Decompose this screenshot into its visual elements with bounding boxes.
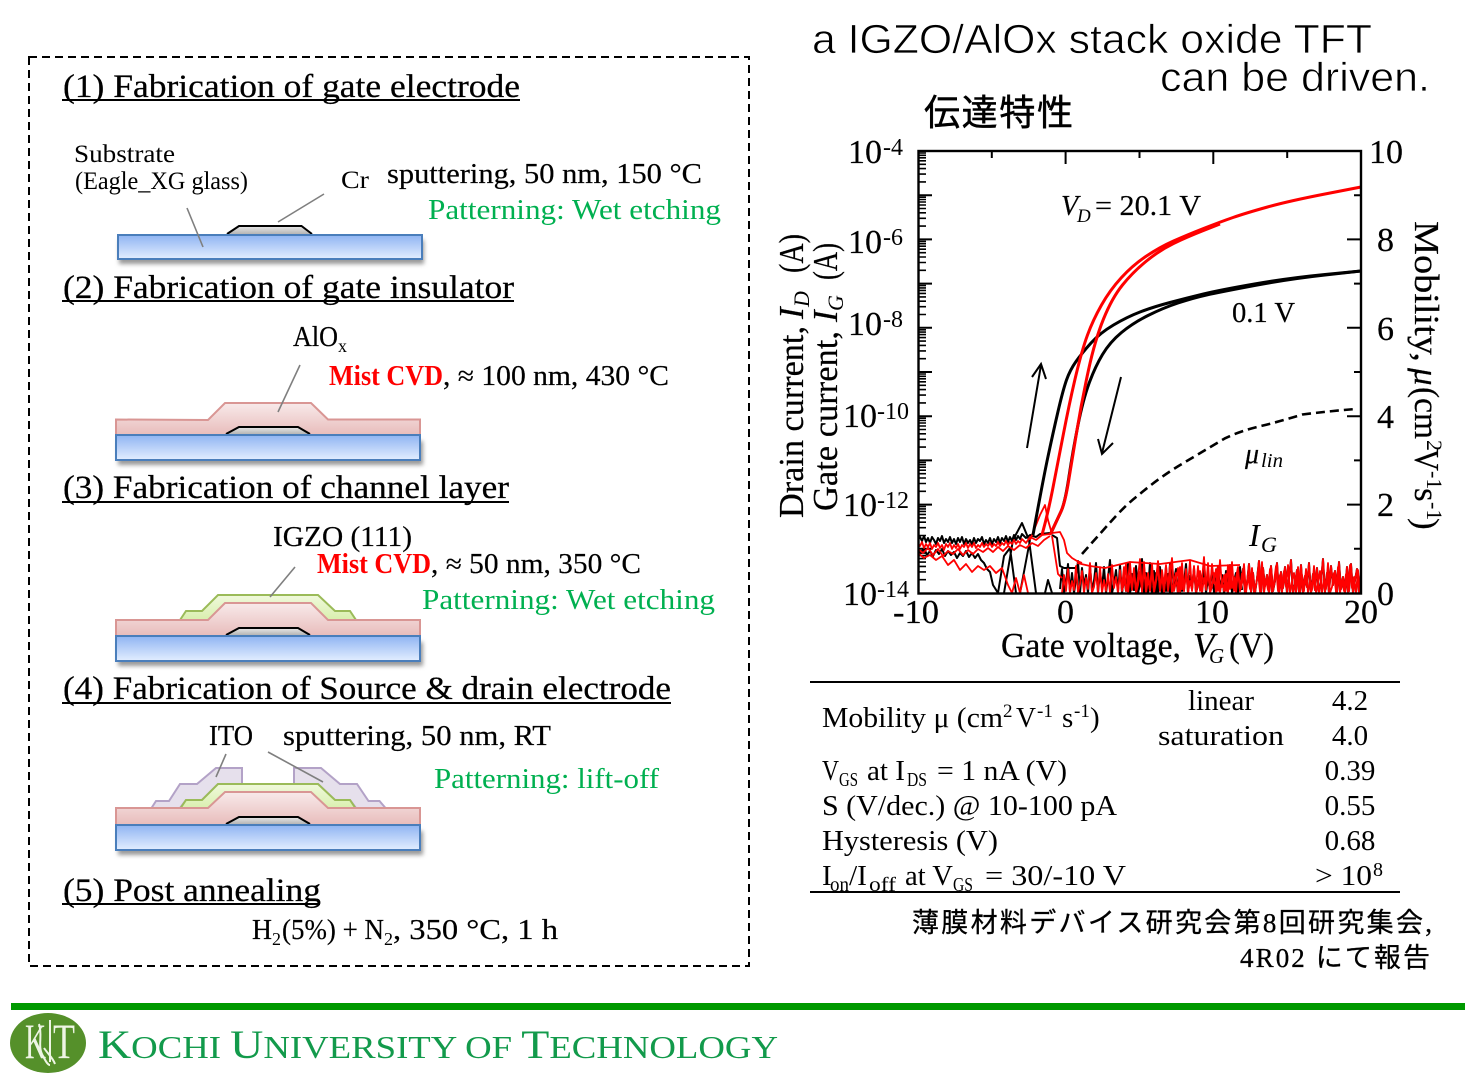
right y axis label: mobility: s [1407,488,1446,502]
label: 0.1 V: 0.1 V [1232,298,1295,329]
right y axis label: mobility: V [1407,449,1446,471]
left axis numbers: 10 [848,306,882,343]
row: mobility: 2 [1003,701,1012,722]
label: mu lin: lin [1261,450,1283,472]
text: step 2 mist CVD [329,360,669,392]
row: mobility: -1 [1037,701,1053,722]
row: on off ratio: = 30/-10 V [985,860,1126,892]
row: mobility: Mobility μ (cm [822,702,1003,734]
row: mobility [822,685,1368,752]
row: threshold: GS [839,769,858,791]
text: step 5 annealing conditions [252,915,558,949]
arrow: reverse sweep [1098,377,1121,454]
row: mobility: linear [1188,685,1254,717]
label: AlOx: AlO [293,322,338,353]
axis ticks [918,151,1361,580]
x axis label: G [1209,644,1224,668]
curve: mobility dashed [1082,409,1356,554]
row: mobility: ) [1090,702,1100,734]
right y axis label: mobility: Mobility, [1407,221,1446,362]
row: threshold: V [822,755,839,787]
left axis numbers: -6 [883,225,903,251]
row: subthreshold swing [822,790,1375,822]
note: conference report: 薄膜材料デバイス研究会第8回研究集会, [912,908,1432,938]
row: hysteresis [822,825,1375,857]
row: on off ratio: 8 [1373,859,1383,881]
icon: university logo: T [53,1013,75,1069]
gate current noise [920,504,1360,592]
text: step 3 mist CVD: Mist CVD [317,548,431,580]
curves: black 0.1 V [1033,271,1361,535]
icon: university logo [10,1013,86,1073]
text: step 1 sputtering: sputtering, 50 nm, 150 °C [387,159,702,190]
text: step 2 mist CVD: , ≈ 100 nm, 430 °C [443,361,669,392]
diagram: step 4 stack [116,752,423,855]
label: VD = 20.1 V: V [1061,191,1081,222]
bottom axis numbers: 20 [1344,594,1378,631]
label: AlOx: x [338,336,347,356]
right axis numbers: 8 [1377,222,1394,259]
heading: step 5: (5) Post annealing [63,873,321,909]
label: VD = 20.1 V [1061,191,1201,227]
text: step 1 patterning: Patterning: Wet etching [428,194,721,226]
y axis label: gate current: I [806,308,845,323]
row: mobility: 4.0 [1332,720,1368,752]
y axis label: gate current: (A) [806,243,845,280]
x axis label: Gate voltage, [1001,626,1181,665]
left axis numbers: -12 [877,488,909,514]
text: step 4 sputtering: sputtering, 50 nm, RT [283,721,551,752]
right y axis label: mobility: -1 [1422,471,1447,489]
bottom axis numbers [893,594,1378,631]
note: conference report [912,908,1432,973]
label: VD = 20.1 V: D [1076,206,1091,227]
row: threshold: = 1 nA (V) [937,755,1067,787]
row: on off ratio: on [830,874,849,896]
footer bar [11,1003,1465,1010]
label: IGZO: IGZO (111) [273,522,412,553]
text: step 5 annealing conditions: 2 [272,929,281,949]
row: mobility: V [1016,702,1036,734]
row: threshold: DS [907,769,927,791]
row: hysteresis: Hysteresis (V) [822,825,998,857]
row: threshold: 0.39 [1325,755,1375,787]
y axis label: gate current: Gate current, [806,331,845,511]
text: step 2 mist CVD: Mist CVD [329,360,443,392]
label: ITO: ITO [209,721,253,752]
row: threshold: at I [867,755,905,787]
right y axis label: mobility: μ [1407,367,1446,386]
right axis numbers: 0 [1377,576,1394,613]
left axis numbers: 10 [843,398,877,435]
row: mobility: -1 [1074,701,1090,722]
row: mobility: saturation [1158,720,1285,752]
x axis label [1001,626,1274,668]
right y axis label: mobility: ) [1407,518,1446,530]
label: substrate: Substrate [74,141,175,168]
y axis label: drain current: D [789,291,814,308]
row: on off ratio: I [822,860,832,892]
left axis numbers: 10 [843,576,877,613]
bottom axis numbers: 0 [1057,594,1074,631]
row: on off ratio: off [869,874,896,896]
row: on off ratio: GS [953,874,973,896]
text: step 5 annealing conditions: 2 [384,929,393,949]
bottom axis numbers: 10 [1195,594,1229,631]
label: IG: I [1248,517,1261,553]
left axis numbers: -4 [883,135,903,161]
label: mu lin: μ [1244,439,1259,470]
x axis label: V [1193,626,1218,665]
note: conference report: 4R02 にて報告 [1240,943,1430,973]
right axis numbers: 10 [1369,134,1403,171]
text: step 5 annealing conditions: (5%) + N [282,915,384,946]
row: on off ratio: /I [849,860,867,892]
row: threshold [822,755,1375,791]
left axis numbers: -14 [877,577,909,603]
panel: fabrication process [29,57,749,966]
label: Cr: Cr [341,167,370,194]
text: step 3 mist CVD [317,548,641,580]
right y axis label: mobility: 2 [1422,440,1447,451]
curves: red 20.1 V [1042,187,1361,535]
bottom axis numbers: -10 [893,594,939,631]
text: step 3 mist CVD: , ≈ 50 nm, 350 °C [431,549,641,580]
title: a IGZO/AlOx stack oxide TFT [812,16,1372,62]
left axis numbers: -8 [883,307,903,333]
x axis label: (V) [1229,626,1274,665]
right axis numbers: 4 [1377,399,1394,436]
row: mobility: 4.2 [1332,685,1368,717]
heading: step 4: (4) Fabrication of Source & drain electrode [63,671,671,707]
chart: transfer characteristics [772,134,1447,668]
label: mu lin [1244,439,1283,472]
text: step 5 annealing conditions: , 350 °C, 1 h [393,915,558,946]
arrow: forward sweep [1027,364,1046,448]
row: subthreshold swing: 0.55 [1325,790,1375,822]
row: on off ratio: > 10 [1315,860,1372,892]
diagram: step 2 stack [116,365,423,465]
right axis numbers: 6 [1377,311,1394,348]
label: IG [1248,517,1277,557]
table: device parameters [810,682,1400,896]
right y axis label: mobility: -1 [1422,502,1447,520]
row: on off ratio: at V [905,860,953,892]
y axis label: gate current [806,243,848,511]
heading: step 3: (3) Fabrication of channel layer [63,470,509,506]
left axis numbers: 10 [843,487,877,524]
right y axis label: mobility [1407,221,1447,530]
label: IG: G [1261,532,1277,557]
title: can be driven. [1160,54,1430,100]
university name: KOCHI UNIVERSITY OF TECHNOLOGY [98,1022,778,1067]
label: substrate [74,141,248,195]
row: on off ratio [822,859,1383,896]
left axis numbers [843,134,909,613]
right axis numbers [1369,134,1403,613]
heading: step 1: (1) Fabrication of gate electrode [63,69,520,105]
icon: university logo: K [25,1013,46,1069]
heading: step 2: (2) Fabrication of gate insulator [63,270,514,306]
chart heading: 伝達特性 [924,84,1073,136]
y axis label: drain current [772,234,814,518]
row: hysteresis: 0.68 [1325,825,1375,857]
diagram: step 1 stack [118,194,424,264]
y axis label: drain current: (A) [772,234,811,273]
label: VD = 20.1 V: = 20.1 V [1095,191,1201,222]
row: mobility: s [1062,702,1073,734]
row: subthreshold swing: S (V/dec.) @ 10-100 pA [822,790,1117,822]
diagram: step 3 stack [116,567,423,666]
right y axis label: mobility: (cm [1407,387,1446,439]
y axis label: drain current: I [772,305,811,320]
y axis label: gate current: G [823,295,848,311]
label: substrate: (Eagle_XG glass) [75,168,248,195]
text: step 5 annealing conditions: H [252,915,272,946]
left axis numbers: -10 [877,399,909,425]
y axis label: drain current: Drain current, [772,326,811,518]
left axis numbers: 10 [848,134,882,171]
frame [918,151,1361,594]
text: step 3 patterning: Patterning: Wet etching [422,584,715,616]
title [812,16,1430,100]
right axis numbers: 2 [1377,487,1394,524]
text: step 4 patterning: Patterning: lift-off [434,763,659,795]
left axis numbers: 10 [848,224,882,261]
